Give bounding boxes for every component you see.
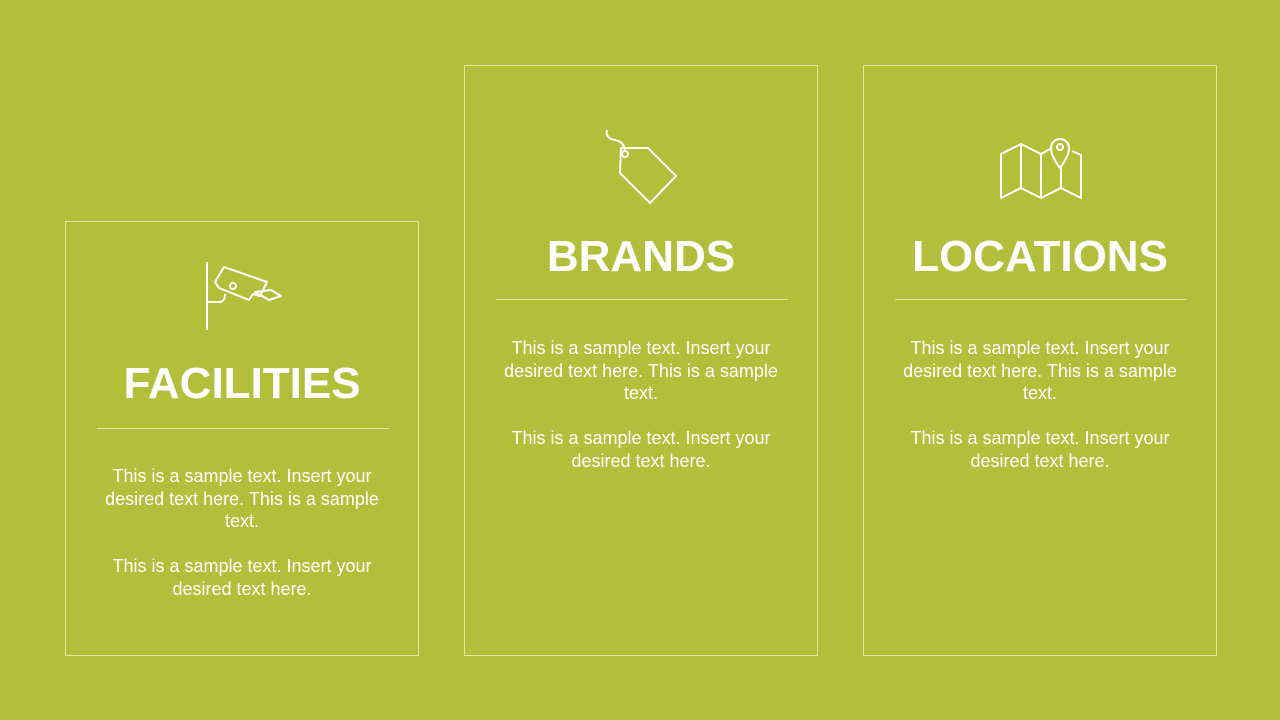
text block [903,338,1177,470]
text block: This is a sample text. Insert your desired text here. [112,556,372,598]
text block: This is a sample text. Insert your desired text here. This is a sample text. [903,338,1177,403]
title: FACILITIES [123,359,361,408]
text block [504,338,778,470]
icon: map [1000,138,1082,199]
text block: This is a sample text. Insert your desired text here. [910,428,1170,470]
panel: locations [863,65,1217,656]
icon: security camera [206,262,282,330]
text block [105,466,379,598]
text block: This is a sample text. Insert your desired text here. [511,428,771,470]
icon: tag [606,130,677,204]
panel: brands [464,65,818,656]
title: BRANDS [547,232,735,281]
text block: This is a sample text. Insert your desired text here. This is a sample text. [105,466,379,531]
panel: facilities [65,221,419,656]
text block: This is a sample text. Insert your desired text here. This is a sample text. [504,338,778,403]
title: LOCATIONS [912,232,1168,281]
